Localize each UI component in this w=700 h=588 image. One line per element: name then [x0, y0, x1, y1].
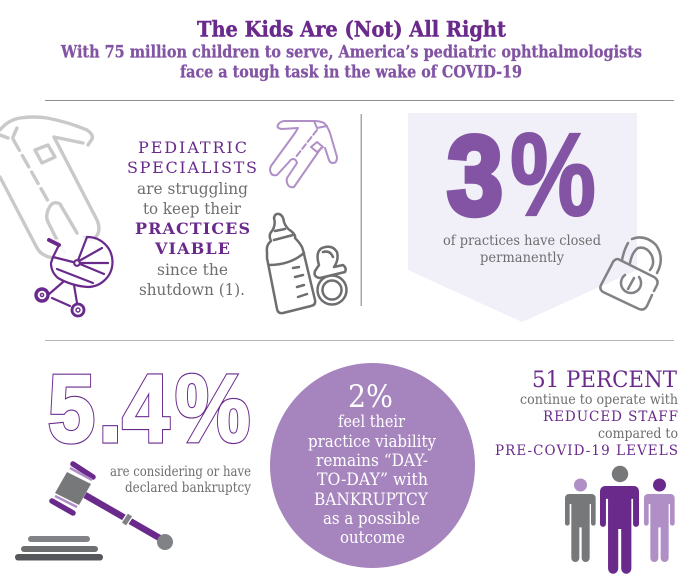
- subtitle: [60, 42, 642, 82]
- text: pediatric specialists: VIABLE: [154, 239, 230, 258]
- stat: 5.4% outlined: 5.4%: [48, 356, 250, 463]
- text: reduced staff: [495, 368, 678, 459]
- caption: bankruptcy: are considering or have: [110, 464, 251, 480]
- caption: bankruptcy: declared bankruptcy: [125, 480, 251, 496]
- icon: pacifier: [315, 247, 346, 304]
- person: left: [565, 478, 596, 562]
- text: reduced staff: 51 PERCENT: [532, 368, 677, 393]
- text: reduced staff: compared to: [598, 426, 678, 442]
- icon: stroller: [36, 237, 112, 316]
- caption: closed permanently: permanently: [480, 250, 564, 266]
- circle text: as a possible: [323, 509, 420, 528]
- icon: gavel: [15, 464, 173, 560]
- text: reduced staff: PRE-COVID-19 LEVELS: [495, 443, 678, 459]
- text: reduced staff: REDUCED STAFF: [543, 409, 678, 425]
- stat: 2%: 2%: [348, 379, 393, 415]
- icon: large gray onesie: [0, 117, 99, 258]
- stat: 3%: [447, 109, 596, 241]
- person: right: [644, 478, 675, 562]
- panel background: [408, 113, 637, 322]
- text: pediatric specialists: PRACTICES: [135, 219, 250, 238]
- caption: closed permanently: [443, 233, 601, 266]
- circle text: practice viability: [308, 432, 437, 451]
- stat: 5.4% outlined: 5.4%: [48, 356, 250, 463]
- text: pediatric specialists: are struggling: [137, 179, 248, 198]
- title: The Kids Are (Not) All Right: [197, 16, 506, 42]
- person: center: [600, 466, 639, 574]
- circle text: TO-DAY” with: [317, 470, 428, 489]
- caption: closed permanently: of practices have closed: [443, 233, 601, 249]
- icon: baby bottle: [267, 214, 315, 313]
- text: pediatric specialists: to keep their: [143, 199, 241, 218]
- circle text: BANKRUPTCY: [314, 490, 429, 509]
- text: pediatric specialists: SPECIALISTS: [127, 158, 257, 177]
- circle text: outcome: [340, 528, 405, 547]
- circle text: remains “DAY-: [316, 451, 428, 470]
- caption: bankruptcy: [110, 464, 251, 496]
- text: pediatric specialists: PEDIATRIC: [138, 138, 247, 157]
- stat: 3%: 3: [447, 113, 503, 238]
- subtitle: face a tough task in the wake of COVID-19: [180, 62, 522, 82]
- circle text: feel their: [338, 412, 405, 431]
- panel: closed practices: [408, 109, 637, 322]
- icon: padlock: [600, 237, 661, 310]
- title block: [60, 16, 642, 82]
- circle text: [308, 412, 437, 547]
- callout: day-to-day circle: [270, 363, 475, 568]
- text: pediatric specialists: shutdown (1).: [139, 280, 245, 299]
- text: pediatric specialists: since the: [157, 260, 228, 279]
- stat: 3%: %: [510, 109, 596, 241]
- text: reduced staff: continue to operate with: [520, 392, 678, 408]
- text: pediatric specialists: [127, 138, 257, 299]
- icon: small lilac onesie: [270, 121, 337, 187]
- icon: three people: [565, 466, 675, 574]
